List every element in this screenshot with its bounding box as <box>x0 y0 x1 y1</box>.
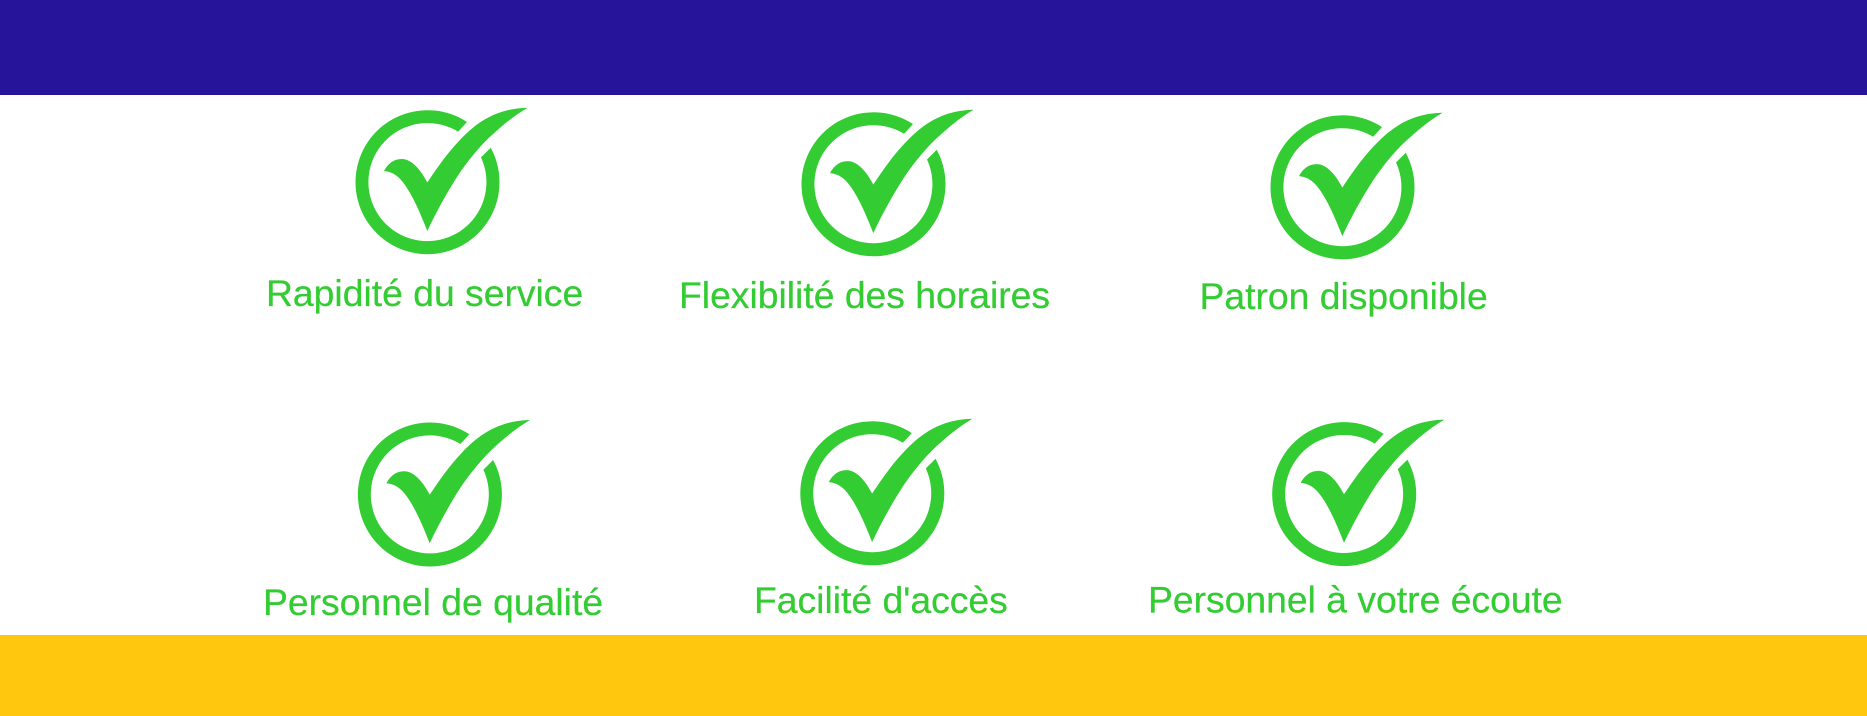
label: Flexibilité des horaires: Flexibilité des horaires <box>679 274 1050 316</box>
item: Personnel de qualité <box>263 420 603 623</box>
item: Rapidité du service <box>266 108 583 314</box>
label: Patron disponible: Patron disponible <box>1200 275 1488 317</box>
label: Personnel à votre écoute: Personnel à votre écoute <box>1148 579 1563 621</box>
item: Facilité d'accès <box>754 419 1008 621</box>
label: Facilité d'accès: Facilité d'accès <box>754 579 1008 621</box>
item: Personnel à votre écoute <box>1148 420 1563 621</box>
icon: check mark in circle <box>1271 113 1443 259</box>
icon: check mark in circle <box>356 108 528 254</box>
icon: check mark in circle <box>358 420 530 567</box>
icon: check mark in circle <box>800 419 972 565</box>
icon: check mark in circle <box>802 110 974 256</box>
label: Personnel de qualité: Personnel de qualité <box>263 581 603 623</box>
item: Patron disponible <box>1200 113 1488 317</box>
top blue band <box>0 0 1867 95</box>
icon: check mark in circle <box>1272 420 1444 566</box>
bottom yellow band <box>0 635 1867 716</box>
label: Rapidité du service: Rapidité du service <box>266 272 583 314</box>
item: Flexibilité des horaires <box>679 110 1050 316</box>
